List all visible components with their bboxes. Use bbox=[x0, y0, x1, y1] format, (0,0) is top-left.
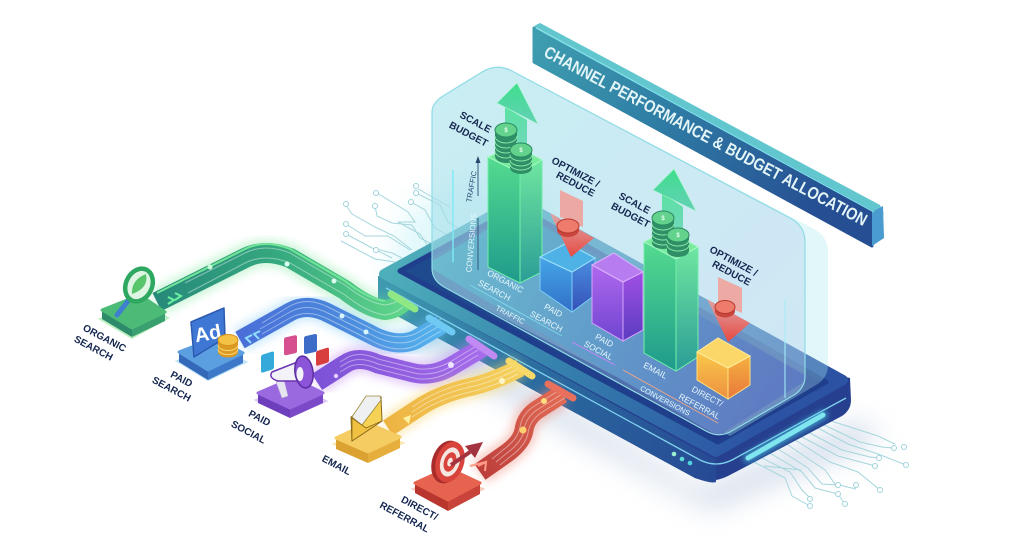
bar labels: PAID bbox=[543, 301, 564, 319]
bar labels: SEARCH bbox=[476, 278, 512, 303]
coins: stack 1: $ bbox=[504, 128, 508, 134]
label: SEARCH bbox=[150, 375, 192, 405]
label: scale budget 1: BUDGET bbox=[447, 120, 489, 150]
bar labels bbox=[476, 268, 725, 422]
floor under glass bbox=[432, 226, 804, 434]
bar labels: PAID bbox=[594, 331, 615, 349]
label: PAID bbox=[246, 409, 272, 429]
bar: direct / referral bbox=[697, 338, 750, 399]
bar: paid social bbox=[592, 253, 643, 341]
axis: traffic and conversions: TRAFFIC bbox=[464, 170, 479, 203]
label: SOCIAL bbox=[229, 419, 267, 447]
status lights bbox=[672, 452, 692, 465]
icon: megaphone bbox=[271, 355, 315, 398]
icon: social tiles bbox=[261, 334, 329, 373]
ribbon: paid search bbox=[240, 301, 452, 349]
coins: stack 2: $ bbox=[661, 216, 665, 222]
ribbon: direct / referral bbox=[470, 384, 573, 472]
channel: paid social bbox=[229, 334, 329, 447]
icon: target bbox=[426, 436, 483, 488]
circuit traces: lower right bbox=[750, 420, 908, 508]
axis: traffic and conversions: CONVERSIONS bbox=[464, 213, 479, 273]
ribbon: email bbox=[388, 361, 532, 428]
arrow: scale up 2 bbox=[653, 169, 696, 245]
arrow: reduce 1 bbox=[550, 190, 594, 257]
icon: ad card: Ad bbox=[193, 321, 223, 347]
coins: stack 1: $ bbox=[519, 148, 523, 154]
bar: email bbox=[644, 230, 698, 371]
label: optimize reduce 2: OPTIMIZE / bbox=[707, 245, 759, 279]
title text: CHANNEL PERFORMANCE & BUDGET ALLOCATION bbox=[541, 43, 870, 230]
label: PAID bbox=[168, 370, 194, 390]
platform top rim bbox=[384, 201, 843, 452]
label bbox=[229, 409, 272, 447]
channel: direct / referral bbox=[378, 436, 483, 535]
light bar bbox=[748, 415, 823, 458]
label: EMAIL bbox=[320, 454, 352, 478]
ribbon: organic search bbox=[157, 244, 415, 315]
coins: stack 2: $ bbox=[676, 233, 680, 239]
channel: organic search bbox=[72, 264, 168, 364]
channel: email bbox=[320, 396, 403, 478]
platform screen bbox=[400, 207, 826, 442]
bar labels: SEARCH bbox=[528, 309, 564, 334]
arrow: scale up 1 bbox=[497, 83, 538, 160]
label: SEARCH bbox=[72, 334, 114, 364]
bracket lines bbox=[470, 285, 718, 423]
glass panel back bbox=[432, 67, 828, 436]
bar labels: SOCIAL bbox=[582, 339, 615, 362]
label: scale budget 1: SCALE bbox=[458, 110, 493, 136]
title banner bbox=[534, 23, 884, 246]
icon: coins bbox=[218, 334, 238, 358]
label: scale budget 1 bbox=[447, 110, 493, 150]
device platform bbox=[378, 201, 851, 482]
label: REFERRAL bbox=[378, 500, 431, 535]
coin: reduce 2 bbox=[715, 300, 735, 318]
axis: traffic and conversions bbox=[464, 156, 480, 273]
bar labels: TRAFFIC bbox=[494, 303, 527, 326]
label: optimize reduce 1: REDUCE bbox=[554, 170, 597, 200]
bar: organic search bbox=[488, 145, 542, 283]
label: DIRECT/ bbox=[399, 495, 440, 523]
pad bbox=[100, 295, 168, 338]
label: scale budget 2: BUDGET bbox=[609, 201, 651, 231]
icon: magnifier bbox=[117, 264, 158, 315]
bar: paid search bbox=[540, 243, 595, 312]
icon: envelope bbox=[351, 396, 382, 441]
bar labels: CONVERSIONS bbox=[639, 384, 692, 418]
pad bbox=[413, 468, 483, 511]
label: ORGANIC bbox=[81, 323, 128, 355]
label: scale budget 2: SCALE bbox=[617, 191, 652, 217]
channel: paid search bbox=[150, 308, 246, 405]
chart: bars and glass panel bbox=[425, 67, 828, 436]
bar labels: DIRECT/ bbox=[690, 384, 725, 409]
bar labels: ORGANIC bbox=[486, 268, 525, 295]
pad bbox=[177, 338, 246, 380]
label: optimize reduce 2: REDUCE bbox=[710, 259, 753, 289]
label: optimize reduce 1: OPTIMIZE / bbox=[549, 156, 601, 190]
coins: stack 2 bbox=[652, 211, 689, 257]
label bbox=[72, 323, 128, 364]
circuit traces: upper left bbox=[341, 184, 460, 262]
background glow bbox=[390, 180, 880, 510]
bar labels: REFERRAL bbox=[677, 391, 722, 422]
coins: stack 1 bbox=[495, 123, 532, 174]
platform base bbox=[378, 276, 851, 481]
pad bbox=[334, 423, 403, 463]
bar labels: EMAIL bbox=[642, 360, 669, 381]
pad bbox=[256, 378, 326, 418]
ribbon: paid social bbox=[317, 339, 494, 382]
arrow: reduce 2 bbox=[707, 277, 750, 342]
coin: reduce 1 bbox=[557, 219, 579, 237]
